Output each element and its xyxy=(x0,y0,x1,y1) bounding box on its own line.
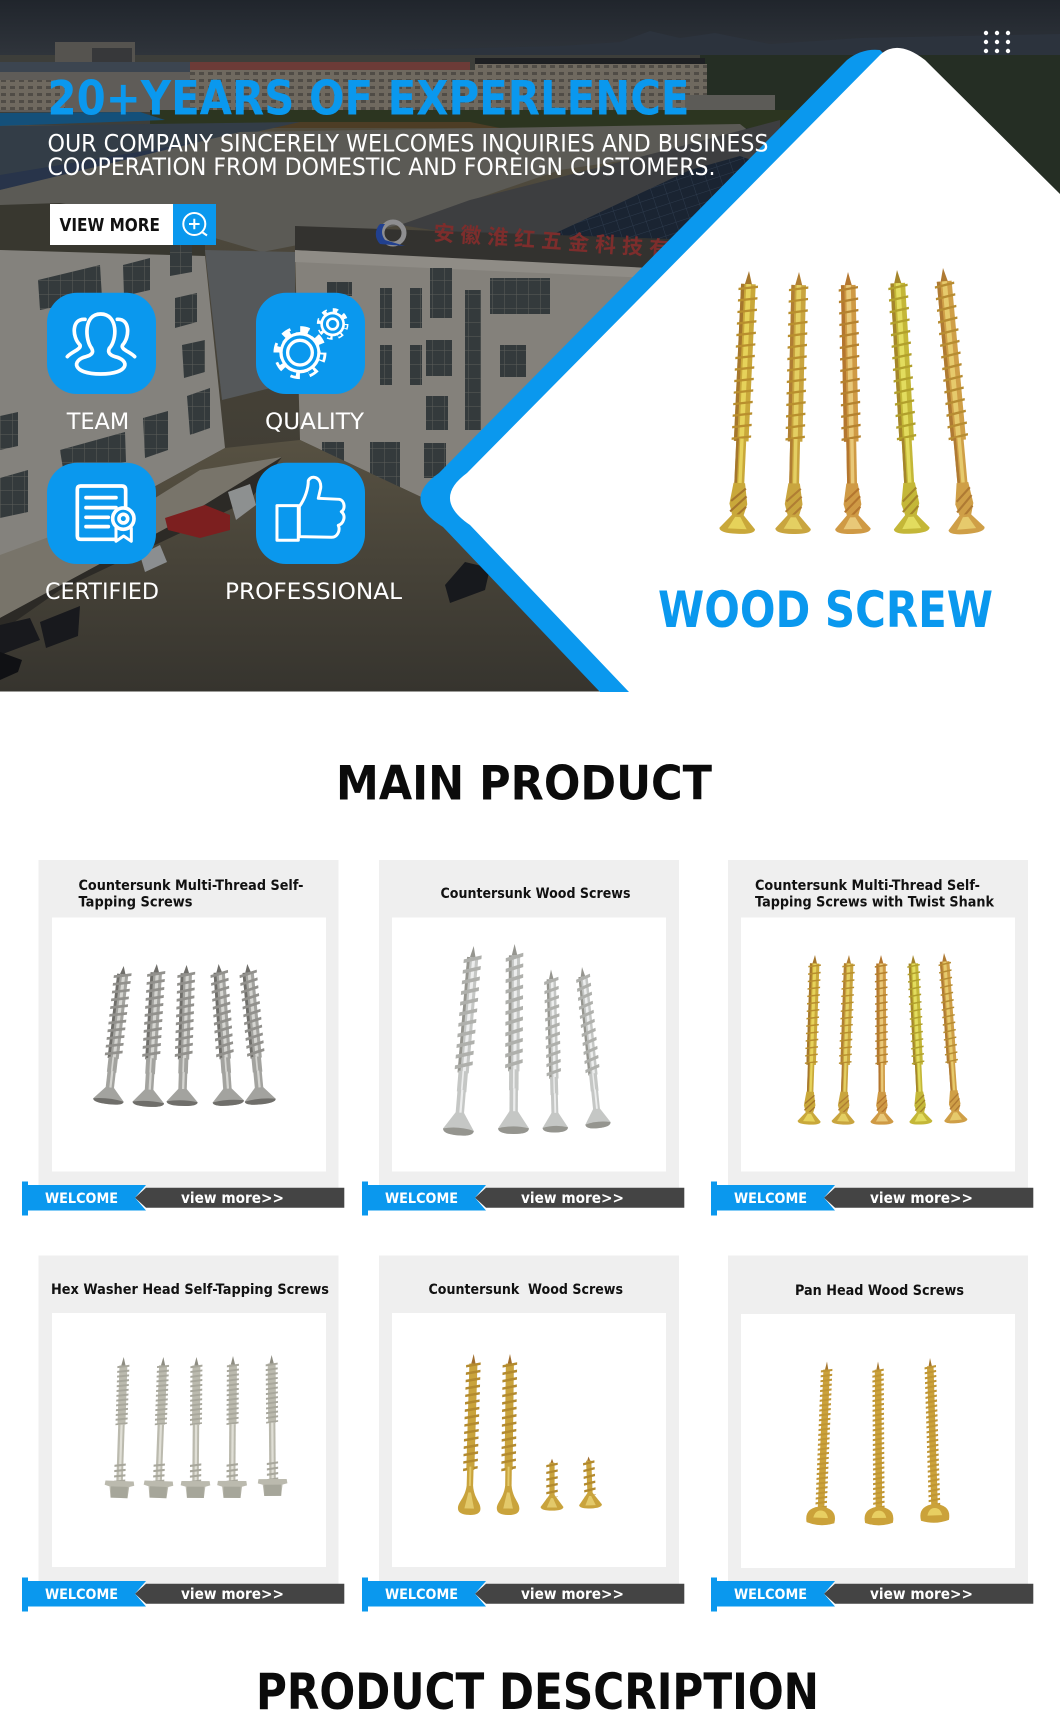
panel: card 4 xyxy=(22,1256,344,1612)
intro text block xyxy=(48,130,768,181)
rooftop sign xyxy=(376,220,668,256)
product photo: gold wood screws xyxy=(719,266,985,536)
card title: Tapping Screws with Twist Shank xyxy=(755,894,995,910)
card title: Pan Head Wood Screws xyxy=(795,1283,964,1299)
welcome bar xyxy=(711,1578,1033,1612)
panel: card 5 xyxy=(362,1256,684,1612)
label: quality: QUALITY xyxy=(265,409,364,435)
panel: card 1 xyxy=(22,860,344,1216)
welcome bar: view more>> xyxy=(521,1585,624,1603)
welcome bar: view more>> xyxy=(181,1585,284,1603)
card title xyxy=(755,878,995,910)
welcome bar: view more>> xyxy=(870,1585,973,1603)
intro text block: COOPERATION FROM DOMESTIC AND FOREIGN CUSTOMERS. xyxy=(48,153,716,181)
label: professional: PROFESSIONAL xyxy=(225,579,402,605)
blue diagonal frame xyxy=(420,50,900,692)
view more button xyxy=(50,204,216,245)
menu dots icon xyxy=(984,31,1010,53)
welcome bar: WELCOME xyxy=(385,1587,458,1603)
intro text block: OUR COMPANY SINCERELY WELCOMES INQUIRIES AND BUSINESS xyxy=(48,130,768,158)
card title: Countersunk Multi-Thread Self- xyxy=(755,878,980,894)
welcome bar xyxy=(711,1182,1033,1216)
panel: card 3 xyxy=(711,860,1033,1216)
panel: card 6 xyxy=(711,1256,1033,1612)
card title: Tapping Screws xyxy=(78,894,192,910)
welcome bar: view more>> xyxy=(181,1189,284,1207)
parking area with awning and cars xyxy=(0,440,508,680)
rooftop sign: 安徽淮红五金科技有 xyxy=(433,217,677,264)
icon tile: team xyxy=(47,293,156,394)
welcome bar: WELCOME xyxy=(45,1191,118,1207)
heading: product description: PRODUCT DESCRIPTION xyxy=(256,1663,819,1721)
welcome bar: view more>> xyxy=(870,1189,973,1207)
product photo xyxy=(458,1354,602,1515)
welcome bar: WELCOME xyxy=(734,1191,807,1207)
welcome bar: WELCOME xyxy=(385,1191,458,1207)
product name: WOOD SCREW xyxy=(658,581,993,639)
label: certified: CERTIFIED xyxy=(45,579,159,605)
card title: Hex Washer Head Self-Tapping Screws xyxy=(51,1282,329,1298)
product photo xyxy=(443,944,611,1137)
product photo xyxy=(104,1355,288,1498)
product photo xyxy=(93,963,276,1108)
heading: main product: MAIN PRODUCT xyxy=(336,756,712,812)
factory roof xyxy=(0,120,780,262)
panel: card 2 xyxy=(362,860,684,1216)
recessed building section xyxy=(205,250,295,400)
card title: Countersunk Wood Screws xyxy=(440,886,630,902)
welcome bar xyxy=(22,1182,344,1216)
welcome bar: view more>> xyxy=(521,1189,624,1207)
welcome bar xyxy=(22,1578,344,1612)
welcome bar: WELCOME xyxy=(45,1587,118,1603)
title: 20+YEARS OF EXPERLENCE xyxy=(48,72,690,126)
left building xyxy=(0,250,225,560)
centre building xyxy=(295,262,632,496)
welcome bar xyxy=(362,1182,684,1216)
icon tile: quality xyxy=(256,293,365,394)
view more button: VIEW MORE xyxy=(60,216,160,236)
welcome bar: WELCOME xyxy=(734,1587,807,1603)
white product panel xyxy=(450,48,1060,692)
card title: Countersunk Multi-Thread Self- xyxy=(78,878,304,894)
icon tile: professional xyxy=(256,463,365,564)
welcome bar xyxy=(362,1578,684,1612)
building windows xyxy=(0,243,550,518)
card title: Countersunk Wood Screws xyxy=(428,1282,623,1298)
card title xyxy=(78,878,304,910)
product photo xyxy=(806,1358,949,1526)
panel: hero factory photo xyxy=(0,0,1060,692)
label: team: TEAM xyxy=(66,409,129,435)
product photo xyxy=(798,952,968,1125)
icon tile: certified xyxy=(47,463,156,564)
